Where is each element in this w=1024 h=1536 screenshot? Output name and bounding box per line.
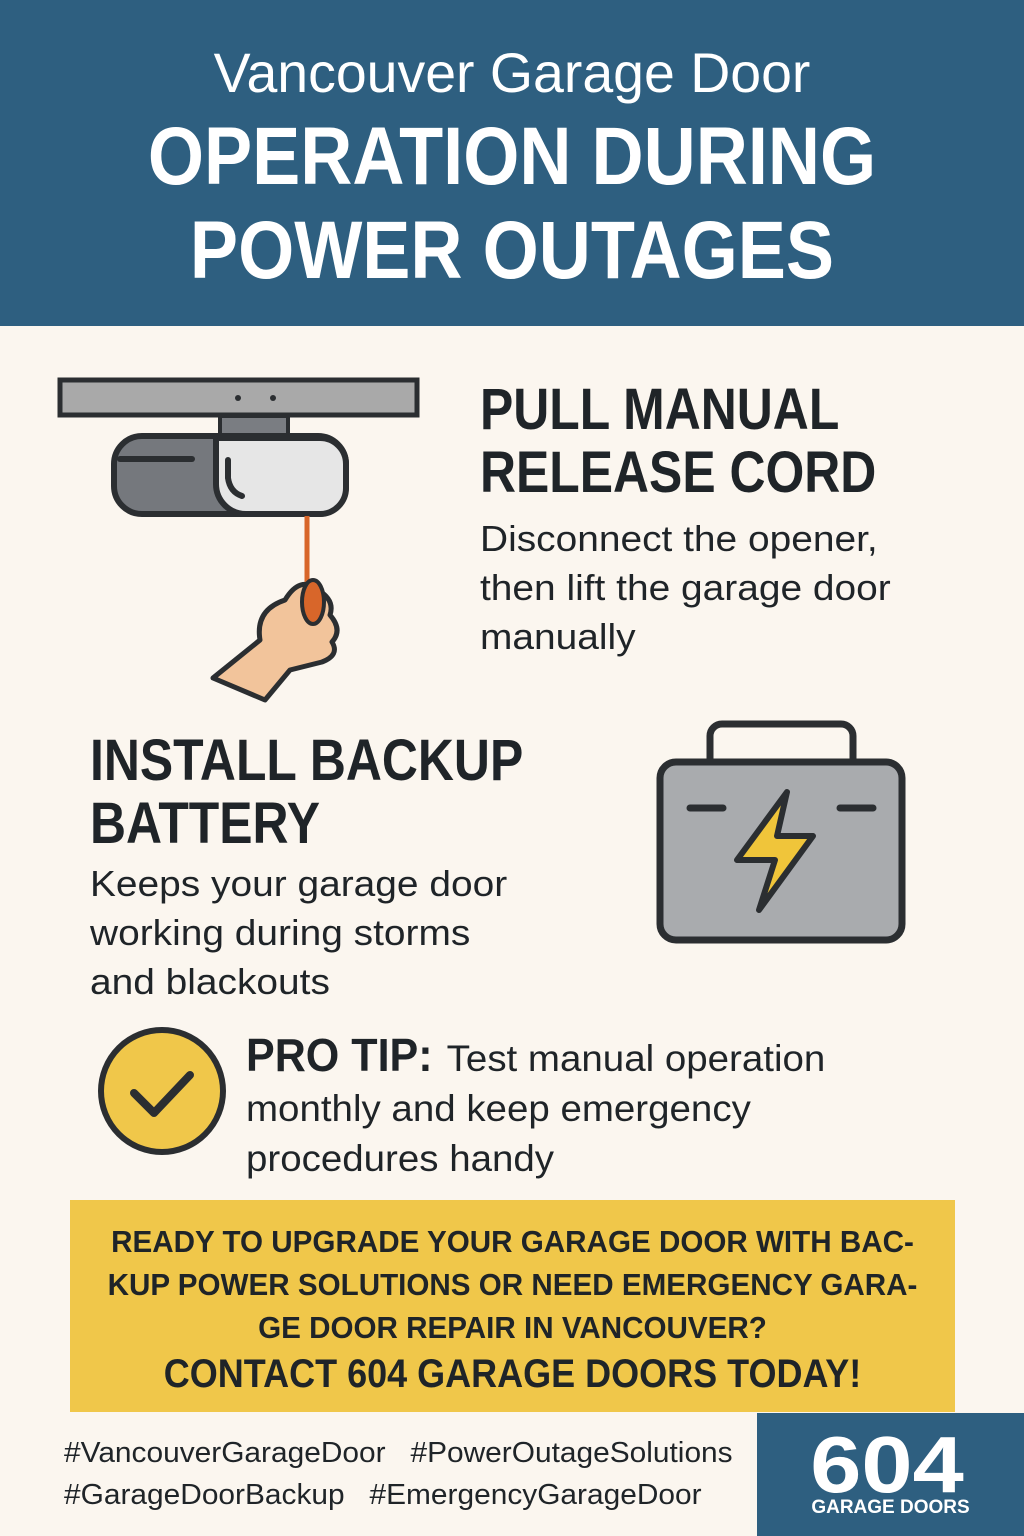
logo number: 604 [810, 1420, 964, 1509]
text: pull cord description: then lift the garage door [480, 567, 891, 608]
heading: pull manual release cord: PULL MANUAL [480, 377, 839, 442]
heading: install backup battery: INSTALL BACKUP [90, 728, 523, 793]
heading: pull manual release cord [480, 377, 876, 505]
pro tip text: Test manual operation [447, 1038, 825, 1079]
main title: POWER OUTAGES [190, 205, 834, 296]
main title [148, 111, 876, 296]
callout call to action: CONTACT 604 GARAGE DOORS TODAY! [164, 1352, 861, 1396]
callout text: KUP POWER SOLUTIONS OR NEED EMERGENCY GARA- [108, 1267, 917, 1302]
text: pull cord description [480, 518, 891, 657]
text: battery description: and blackouts [90, 961, 330, 1002]
logo caption: GARAGE DOORS [811, 1497, 970, 1518]
icon: check circle [98, 1027, 226, 1155]
icon: battery [656, 720, 906, 944]
callout text: READY TO UPGRADE YOUR GARAGE DOOR WITH BAC- [111, 1224, 914, 1259]
main title: OPERATION DURING [148, 111, 876, 202]
text: battery description [90, 863, 507, 1002]
pro tip text: PRO TIP: [246, 1029, 433, 1081]
heading: pull manual release cord: RELEASE CORD [480, 440, 876, 505]
text: pull cord description: manually [480, 616, 636, 657]
subtitle: Vancouver Garage Door [214, 41, 810, 104]
text: pull cord description: Disconnect the opener, [480, 518, 878, 559]
callout: contact box [70, 1200, 955, 1412]
text: battery description: working during storms [90, 912, 470, 953]
callout text: GE DOOR REPAIR IN VANCOUVER? [258, 1310, 767, 1345]
hashtags: #VancouverGarageDoor #PowerOutageSolutions [64, 1437, 733, 1469]
pro tip text: procedures handy [246, 1138, 554, 1179]
heading: install backup battery: BATTERY [90, 791, 320, 856]
header banner [0, 0, 1024, 326]
text: battery description: Keeps your garage door [90, 863, 507, 904]
pro tip text [246, 1029, 825, 1179]
heading: install backup battery [90, 728, 523, 856]
icon: garage opener with release cord [58, 378, 420, 702]
pro tip text: monthly and keep emergency [246, 1088, 751, 1129]
logo box [757, 1413, 1024, 1536]
hashtags: #GarageDoorBackup #EmergencyGarageDoor [64, 1479, 702, 1511]
hashtags [64, 1437, 733, 1511]
callout text [108, 1224, 917, 1345]
